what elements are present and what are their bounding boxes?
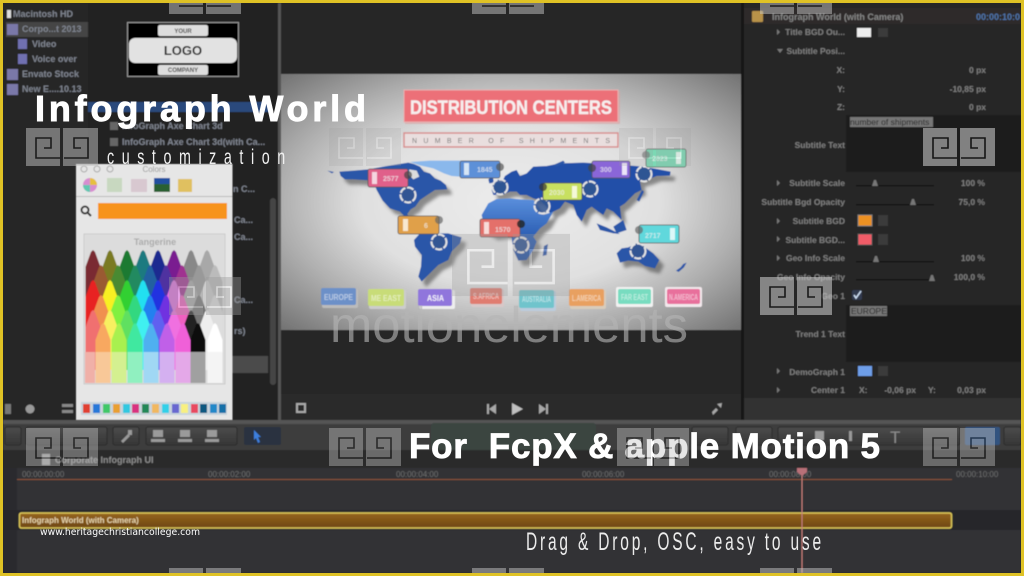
timeline header <box>3 450 1021 468</box>
text tool glyph: T <box>890 428 900 447</box>
panel: inspector: Geo Info Opacity <box>777 272 845 282</box>
tag: far east <box>642 149 686 167</box>
saved swatch bar <box>81 402 227 415</box>
panel: library sidebar <box>3 3 88 420</box>
panel: inspector <box>744 3 1021 420</box>
panel: inspector: 0 px <box>969 102 986 112</box>
panel: inspector: Center 1 <box>811 385 845 395</box>
crayon box <box>84 234 225 384</box>
subtitle banner <box>404 133 618 147</box>
watermark: bottom row 3 <box>617 428 689 466</box>
crayon pale bodies <box>85 352 222 383</box>
watermark: bottom row 1 <box>26 428 98 466</box>
map location rings <box>400 166 652 258</box>
fourth crayon row <box>94 295 222 355</box>
legend: asia <box>418 289 455 309</box>
panel: timeline: 00:00:04:00 <box>396 470 439 479</box>
panel: inspector: Subtitle BGD... <box>786 235 845 245</box>
panel: inspector: number of shipments <box>850 117 929 127</box>
fullscreen toggle <box>712 403 722 415</box>
africa <box>482 198 553 261</box>
watermark: colour panel <box>169 277 241 315</box>
crop tool <box>297 404 305 412</box>
panel: inspector: 100 % <box>961 253 985 263</box>
panel: inspector: 100,0 % <box>954 272 985 282</box>
panel: inspector: -0,06 px <box>884 385 916 395</box>
third crayon row <box>86 280 214 340</box>
toolbar <box>3 423 1021 450</box>
watermark: bottom row 2 <box>329 428 401 466</box>
sliders <box>856 180 935 281</box>
panel: timeline: 00:00:10:00 <box>956 470 999 479</box>
window buttons <box>81 166 113 172</box>
panel: inspector: Z: <box>837 102 845 112</box>
panel: inspector: DemoGraph 1 <box>789 367 845 377</box>
watermark: bottom row 4 <box>923 428 995 466</box>
panel: inspector: Y: <box>837 84 845 94</box>
legend: l.america: L.AMERICA <box>572 294 601 303</box>
map shadow <box>344 168 675 287</box>
watermark: top right <box>760 0 832 14</box>
watermark: bottom edge centre <box>472 568 544 573</box>
panel: effects browser: n C... <box>233 184 255 194</box>
panel: inspector: Y: <box>928 385 936 395</box>
logo thumbnail: YOUR <box>174 29 192 35</box>
legend: far east <box>616 287 653 307</box>
tag: asia: 300 <box>600 167 612 174</box>
tag: south africa <box>480 219 525 237</box>
panel: library sidebar: Corpo...t 2013 <box>22 24 82 34</box>
eurasia <box>492 163 671 222</box>
front crayon row <box>96 323 222 383</box>
panel: library sidebar: Envato Stock <box>22 69 80 79</box>
window title: Colors <box>142 165 166 174</box>
panel: inspector: Title BGD Ou... <box>785 27 845 37</box>
panel: inspector: -10,85 px <box>950 84 986 94</box>
source url: www.heritagechristiancollege.com <box>40 527 200 538</box>
map value tags <box>368 149 686 243</box>
color wells <box>857 28 888 376</box>
logo thumbnail: LOGO <box>164 43 202 58</box>
viewer controls <box>297 403 722 415</box>
panel: inspector: X: <box>836 65 845 75</box>
panel: viewer <box>278 3 744 420</box>
search icon <box>82 206 91 216</box>
title banner <box>404 90 620 124</box>
tag: north america: 2577 <box>383 176 399 183</box>
panel: timeline: 00:00:06:00 <box>582 470 625 479</box>
window body <box>76 164 232 420</box>
caption: drag and drop: Drag & Drop, OSC, easy to use <box>526 528 821 556</box>
panel: inspector: Geo Info Scale <box>786 253 845 263</box>
chart: world map <box>327 161 687 287</box>
panel: library sidebar: Video <box>32 39 57 49</box>
fifth crayon row <box>86 310 214 370</box>
disclosure triangles <box>777 29 783 393</box>
tag: australia: 2717 <box>645 233 661 240</box>
panel: inspector: X: <box>859 385 868 395</box>
hudson bay notch <box>409 169 419 179</box>
panel: effects browser: Ca... <box>234 295 253 305</box>
watermark: viewer left <box>329 128 401 166</box>
panel: inspector: Subtitle Scale <box>789 178 845 188</box>
inspector icon <box>752 11 763 22</box>
panel: inspector: Subtitle Text <box>795 140 845 150</box>
toolbar icons <box>121 430 852 443</box>
timeline clip <box>20 513 952 528</box>
watermark: viewer right <box>619 128 691 166</box>
legend: europe <box>321 288 358 308</box>
heading: infograph world: Infograph World <box>35 88 366 129</box>
tag: middle east <box>539 183 582 200</box>
tag: europe: 1845 <box>477 167 493 174</box>
playhead <box>797 468 807 573</box>
legend: l.america <box>569 289 606 309</box>
legend: s.africa <box>470 288 504 307</box>
panel: effects browser: Ca... <box>234 215 253 225</box>
legend: me east: ME EAST <box>371 294 401 303</box>
blue tool toggle <box>965 427 1000 445</box>
tag: asia <box>588 161 630 178</box>
panel: timeline: 00:00:08:00 <box>769 470 812 479</box>
panel: effects browser: InfoGraph Axe Chart 3d <box>122 121 223 131</box>
watermark: bottom edge left <box>169 568 241 573</box>
watermark: motionelements wordmark: motionelements <box>330 297 688 353</box>
panel: timeline: 00:00:00:00 <box>22 470 65 479</box>
checkbox: geo 1 <box>852 290 862 300</box>
tag: south africa: 1570 <box>495 227 511 234</box>
heading: customization: customization <box>107 145 285 169</box>
timeline clip: Infograph World (with Camera) <box>22 516 139 525</box>
tag: latin america: 6 <box>424 223 428 230</box>
play button <box>512 403 523 415</box>
panel: inspector: 0,03 px <box>957 385 986 395</box>
select tool <box>244 427 281 445</box>
viewer image <box>281 74 741 330</box>
color picker window <box>76 164 232 420</box>
south america <box>414 232 462 282</box>
heading: for fcpx and apple motion 5: For FcpX & apple Motion 5 <box>409 427 880 466</box>
legend: asia: ASIA <box>427 294 444 303</box>
panel: inspector: 0 px <box>969 65 986 75</box>
panel: library sidebar: Voice over <box>32 54 77 64</box>
legend: n.america <box>665 287 702 307</box>
watermark: inspector lower <box>760 277 832 315</box>
color name: Tangerine <box>134 237 176 247</box>
panel gutter <box>3 420 1021 424</box>
panel: timeline <box>3 468 1021 573</box>
tag: north america <box>368 169 412 187</box>
panel: inspector: Geo 1 <box>821 291 845 301</box>
panel: inspector: Subtitle Posi... <box>786 46 845 56</box>
legend: australia <box>519 290 556 311</box>
logo thumbnail: COMPANY <box>168 68 198 74</box>
north america <box>339 163 447 220</box>
panel: inspector: Infograph World (with Camera) <box>772 12 903 22</box>
watermark: left <box>26 128 98 166</box>
tag: europe <box>460 161 504 178</box>
back crayon row <box>86 250 214 310</box>
panel: effects browser <box>88 3 278 420</box>
legend: europe: EUROPE <box>324 293 354 302</box>
legend: s.africa: S.AFRICA <box>473 292 499 301</box>
greenland <box>410 161 467 177</box>
previous frame <box>487 404 496 414</box>
subtitle banner: NUMBER OF SHIPMENTS <box>412 138 610 145</box>
watermark: top left <box>169 0 241 14</box>
panel: inspector: Subtitle BGD <box>793 216 845 226</box>
library panel controls <box>5 404 73 414</box>
legend: australia: AUSTRALIA <box>522 295 551 304</box>
watermark: bottom edge right <box>760 568 832 573</box>
islands <box>327 161 687 272</box>
timecode display <box>431 423 596 450</box>
panel: library sidebar: Macintosh HD <box>13 9 74 19</box>
watermark: inspector upper <box>923 128 995 166</box>
panel: inspector: EUROPE <box>851 306 887 316</box>
logo thumbnail <box>128 22 238 76</box>
selected color swatch <box>98 203 227 219</box>
next frame <box>539 404 548 414</box>
toolbar icons <box>76 178 232 197</box>
panel: inspector: 100 % <box>961 178 985 188</box>
panel: library sidebar: New E....10.13 <box>22 84 82 94</box>
second crayon row <box>94 265 222 325</box>
legend: n.america: N.AMERICA <box>669 293 698 302</box>
legend: far east: FAR EAST <box>621 293 648 302</box>
tag: australia <box>635 225 679 243</box>
australia <box>617 243 659 268</box>
tag: latin america <box>398 216 443 234</box>
panel: timeline: 00:00:02:00 <box>208 470 251 479</box>
panel: inspector: 75,0 % <box>959 197 985 207</box>
tag: far east: 2023 <box>652 156 668 163</box>
watermark: top centre <box>472 0 544 14</box>
tag: middle east: 2030 <box>549 190 565 197</box>
panel: effects browser: rs) <box>234 326 246 336</box>
legend buttons <box>321 287 702 311</box>
panel: inspector: Trend 1 Text <box>796 329 845 339</box>
title banner: DISTRIBUTION CENTERS <box>410 98 612 119</box>
timeline header: Corporate Infograph UI <box>55 455 154 465</box>
panel: inspector: 00:00:10:0 <box>976 12 1020 22</box>
legend: me east <box>368 289 406 309</box>
panel: effects browser: Ca... <box>234 232 253 242</box>
panel: effects browser: InfoGraph Axe Chart 3d(with Ca... <box>122 137 265 147</box>
panel: inspector: Subtitle Bgd Opacity <box>761 197 845 207</box>
watermark: large centre logo <box>452 234 570 296</box>
